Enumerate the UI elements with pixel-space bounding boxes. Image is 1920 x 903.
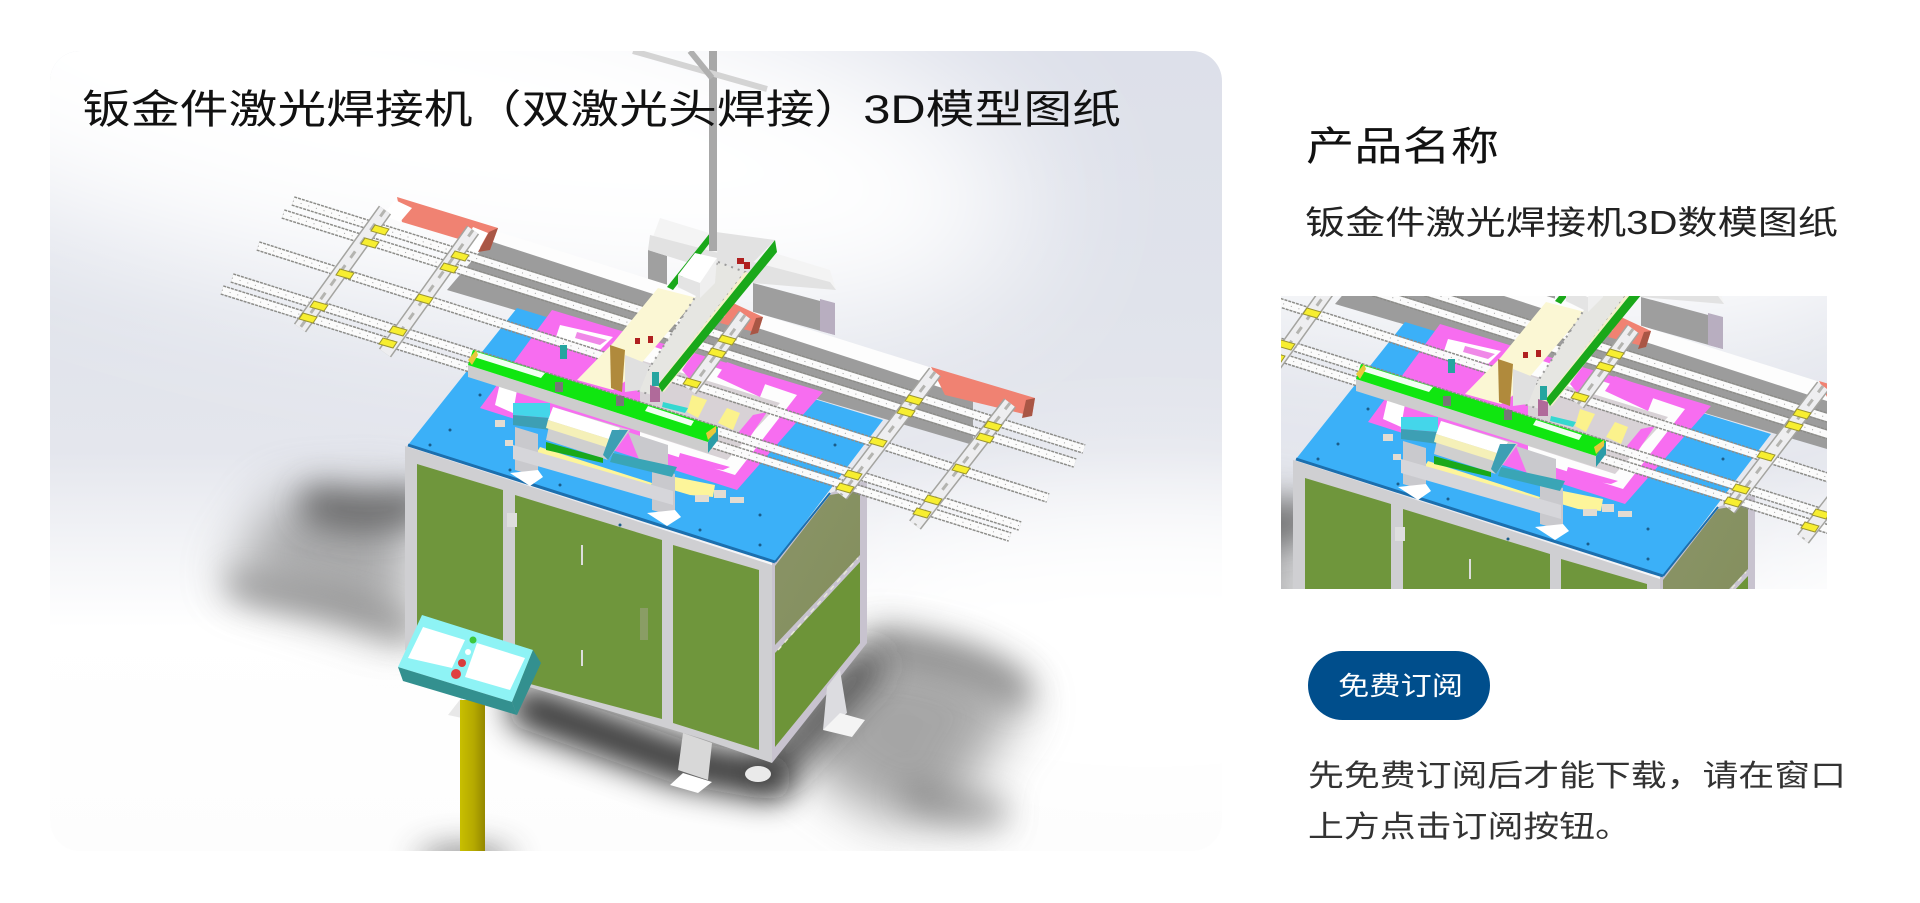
rail cross ladders <box>300 210 1010 525</box>
control box on arm <box>678 253 717 298</box>
note text: 上方点击订阅按钮。 <box>1308 811 1631 844</box>
vertical gantry arm <box>560 232 777 402</box>
machine cabinet frame <box>405 446 867 763</box>
product name value: 钣金件激光焊接机3D数模图纸 <box>1305 204 1838 241</box>
rear cross beam <box>648 218 836 335</box>
conveyor rails <box>222 201 1084 537</box>
green linear beam <box>468 350 718 453</box>
heading: product name: 产品名称 <box>1306 125 1499 169</box>
yellow rail clips <box>299 225 1002 518</box>
red end plates <box>383 197 1035 418</box>
conveyor back beam <box>447 230 973 445</box>
thumbnail: cropped model view <box>625 0 1920 887</box>
note text <box>1308 760 1846 844</box>
button: free subscribe <box>1308 651 1490 720</box>
welding carriage <box>513 403 677 477</box>
vertical mast and top cross bars <box>633 51 767 251</box>
blue table top <box>408 308 883 562</box>
cabinet green door panels <box>417 464 759 750</box>
pink work fixture <box>480 310 823 497</box>
panel background gradient <box>50 51 1827 578</box>
gantry legs and crossbar <box>510 427 681 526</box>
panel: 3D model render <box>50 51 1222 851</box>
cast shadows on the floor <box>225 490 1030 873</box>
note text: 先免费订阅后才能下载，请在窗口 <box>1308 760 1846 793</box>
cabinet side panels <box>775 490 860 747</box>
control panel <box>398 615 541 715</box>
title: 钣金件激光焊接机（双激光头焊接）3D模型图纸 <box>82 88 1121 132</box>
support pole of control panel <box>448 697 485 851</box>
cabinet feet <box>670 670 865 793</box>
small parts on table <box>495 420 744 503</box>
button: free subscribe: 免费订阅 <box>1338 671 1463 701</box>
